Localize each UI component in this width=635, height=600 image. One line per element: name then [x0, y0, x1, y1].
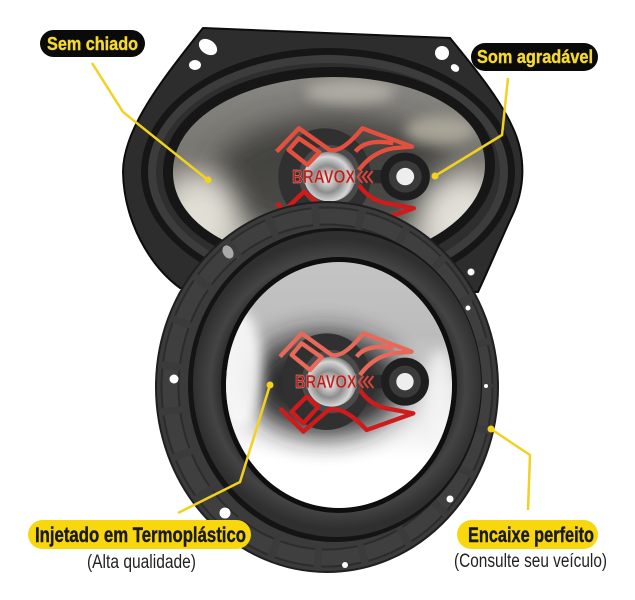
leader line: Injetado [178, 382, 274, 513]
callout: Som agradável [432, 43, 598, 180]
pill label: Som agradável [471, 43, 598, 71]
rubber surround [193, 231, 481, 537]
back speaker (oval 6x9) [123, 28, 522, 296]
pill label: Encaixe: Encaixe perfeito [468, 524, 594, 547]
plate mounting holes [189, 36, 474, 276]
caption: Alta qualidade: (Alta qualidade) [87, 552, 196, 573]
rubber surround [141, 48, 515, 296]
brand hub: front [280, 333, 429, 432]
leader line: Som agradável [432, 78, 508, 180]
callout: Encaixe perfeito [454, 426, 607, 572]
flange [156, 202, 498, 572]
pill label: Injetado: Injetado em Termoplástico [35, 524, 246, 547]
mounting plate [123, 28, 522, 292]
callout: Injetado em Termoplástico [28, 382, 274, 573]
pill label: Encaixe [457, 520, 598, 549]
brand hub: back [277, 128, 430, 227]
leader line: Sem chiado [92, 63, 212, 184]
aluminium cone [173, 77, 485, 240]
front speaker (round 6 inch) [156, 202, 498, 572]
pill label: Som agradável: Som agradável [477, 47, 593, 67]
pill label: Injetado [28, 520, 251, 549]
flange moulded slots [170, 216, 484, 558]
brand hub: back: BRAVOX [292, 167, 356, 188]
pill label: Sem chiado [40, 30, 145, 57]
leader line: Encaixe [488, 426, 530, 510]
white cone [218, 262, 454, 508]
pill label: Sem chiado: Sem chiado [47, 34, 138, 54]
flange holes [170, 243, 488, 568]
brand hub: front: BRAVOX [295, 371, 357, 392]
callout: Sem chiado [40, 30, 212, 184]
